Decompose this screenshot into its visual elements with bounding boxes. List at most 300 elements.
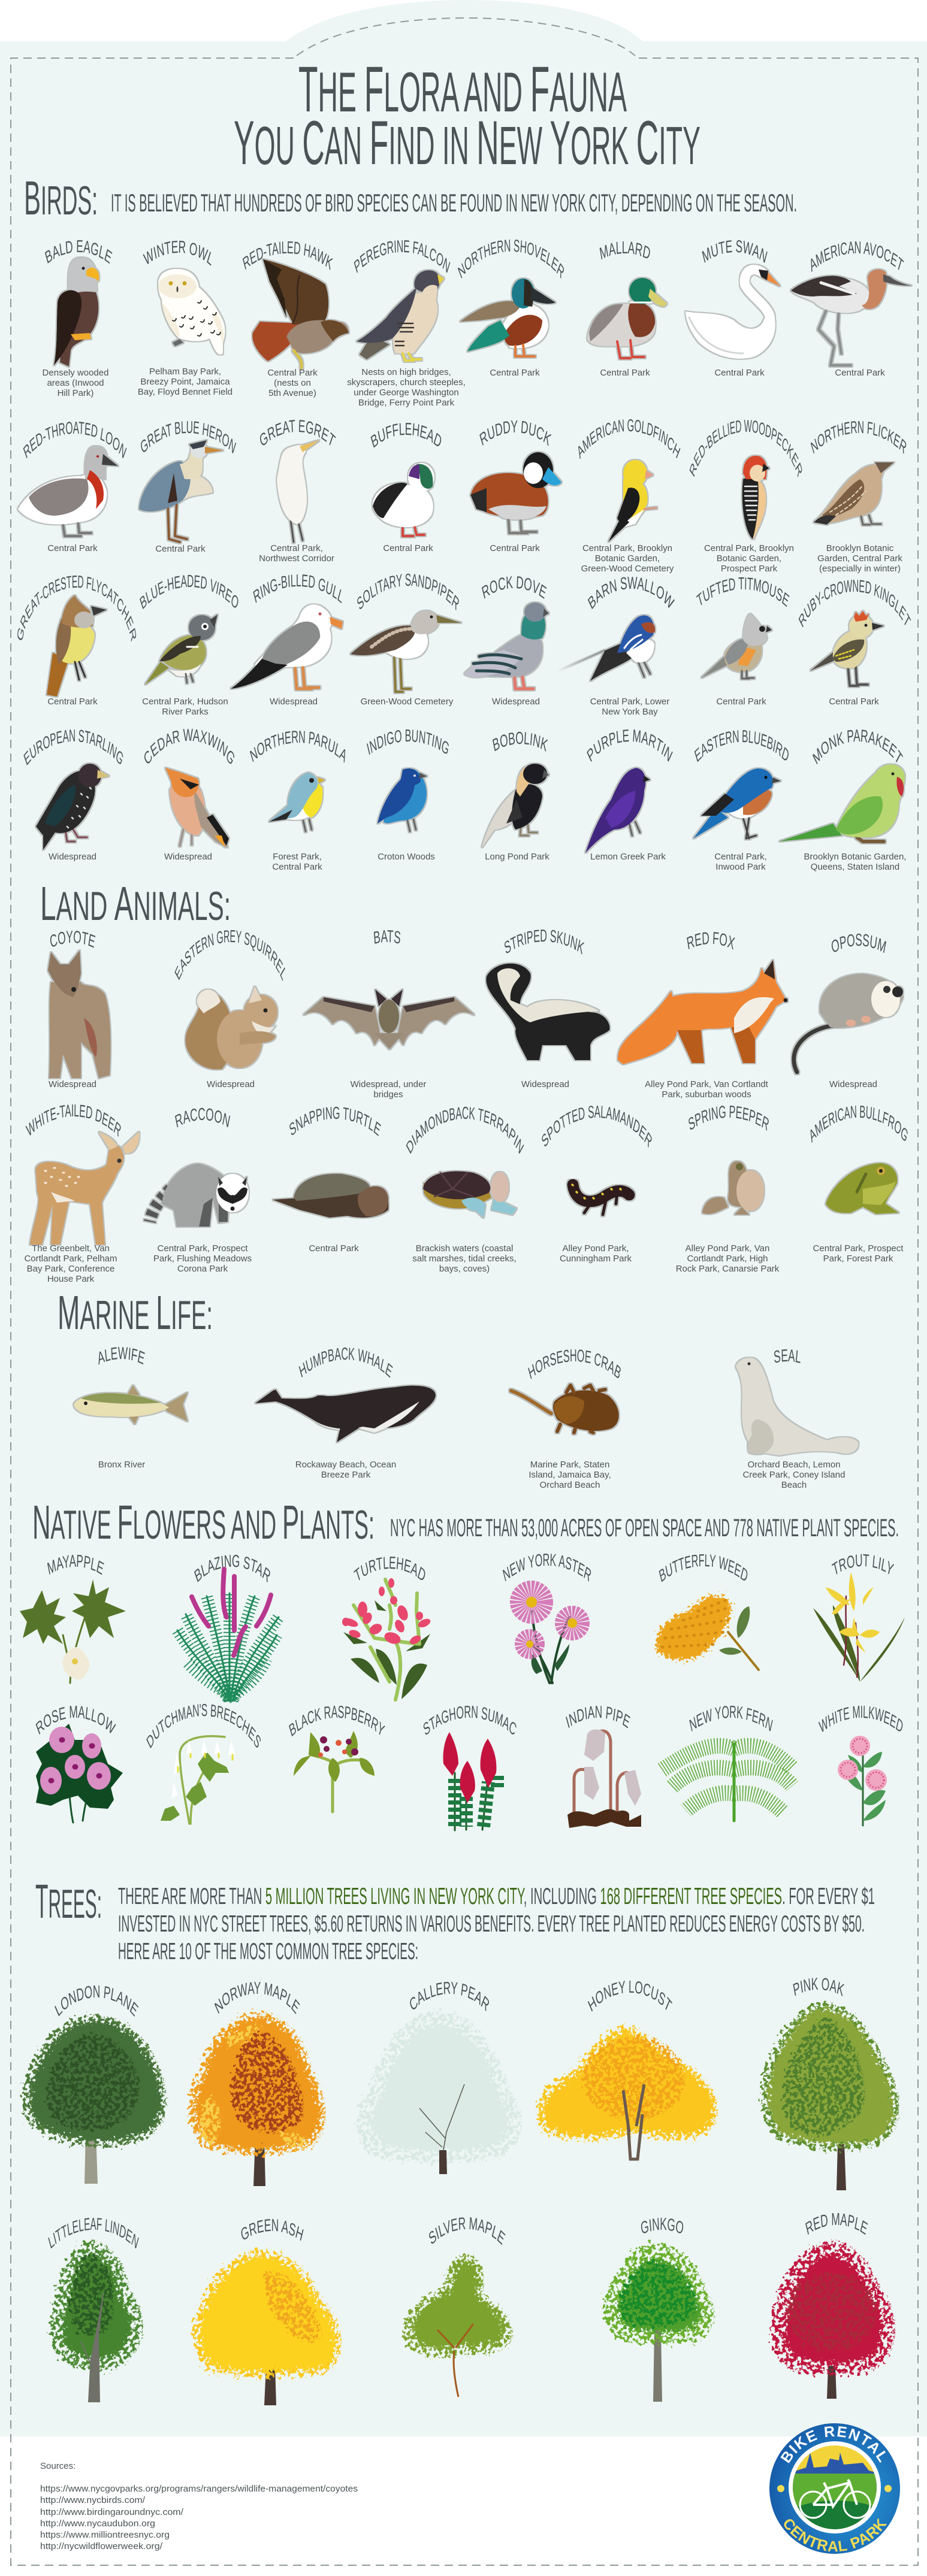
location: New York Bay (602, 707, 658, 717)
location: Forest Park, (273, 852, 322, 862)
name: GREAT-CRESTED FLYCATCHER (17, 576, 137, 642)
location: Central Park (155, 544, 206, 554)
icon: red fox (618, 960, 787, 1064)
sources: http://www.nycaudubon.org (40, 2519, 155, 2529)
heading: marine life: MARINE LIFE: (58, 1286, 213, 1339)
icon: new york aster (520, 1590, 582, 1683)
icon: trout lily (813, 1572, 905, 1682)
icon: spring peeper (702, 1161, 764, 1215)
location: Cortlandt Park, High (687, 1254, 768, 1264)
name: AMERICAN GOLDFINCH (578, 419, 681, 459)
name: LITTLELEAF LINDEN (47, 2214, 140, 2253)
location: Rockaway Beach, Ocean (295, 1460, 396, 1470)
icon: silver maple (407, 2258, 509, 2397)
location: Lemon Greek Park (590, 852, 666, 862)
location: Green-Wood Cemetery (361, 697, 454, 707)
marine: humpback whale (255, 1344, 436, 1480)
heading: native flowers and plants: NATIVE FLOWERS AND PLANTS: (32, 1496, 375, 1549)
icon: black raspberry (294, 1731, 375, 1812)
location: Rock Park, Canarsie Park (676, 1264, 780, 1274)
icon: staghorn sumac (443, 1732, 497, 1830)
bird: ruby-crowned kinglet (796, 576, 913, 707)
tree: red maple (779, 2209, 889, 2399)
name: NORTHERN SHOVELER (458, 240, 564, 279)
location: Central Park, (270, 543, 323, 553)
animal: striped skunk (486, 926, 610, 1089)
location: Central Park (383, 543, 433, 553)
location: Widespread (492, 697, 540, 707)
location: Botanic Garden, (595, 553, 660, 564)
name: MAYAPPLE (46, 1551, 105, 1579)
name: STRIPED SKUNK (503, 926, 585, 958)
name: BUFFLEHEAD (370, 423, 441, 448)
name: RED-TAILED HAWK (242, 241, 333, 270)
icon: loon (18, 446, 118, 536)
location: Alley Pond Park, Van (686, 1243, 769, 1254)
location: Central Park (714, 368, 765, 378)
icon: tufted titmouse (701, 614, 772, 679)
location: Widespread (49, 1079, 96, 1089)
icon: squirrel (185, 986, 277, 1070)
bird: winter owl (138, 237, 232, 397)
name: PINK OAK (792, 1974, 846, 2000)
location: Bay, Floyd Bennet Field (138, 387, 232, 397)
name: BARN SWALLOW (587, 577, 675, 610)
location: Widespread (829, 1079, 877, 1089)
panel: trees (30, 1875, 893, 2405)
bird: red-tailed hawk (241, 238, 349, 398)
title: YOU CAN FIND IN NEW YORK CITY (234, 108, 700, 178)
icon: purple martin (585, 768, 650, 853)
location: Widespread (521, 1079, 569, 1089)
location: Bronx River (98, 1460, 145, 1470)
icon: salamander (572, 1185, 629, 1215)
bird: american goldfinch (575, 416, 682, 574)
bird: indigo bunting (365, 726, 451, 862)
name: NORWAY MAPLE (213, 1978, 301, 2018)
icon: peregrine falcon (357, 270, 444, 361)
icon: mallard (587, 278, 667, 358)
name: GREAT EGRET (260, 420, 336, 446)
bird: rock dove (464, 573, 549, 707)
name: CEDAR WAXWING (144, 728, 234, 764)
icon: norway maple (196, 2018, 320, 2186)
name: COYOTE (49, 927, 96, 952)
tree: green ash (200, 2215, 336, 2405)
icon: butterfly weed (656, 1596, 759, 1670)
panel: native flowers and plants (20, 1496, 905, 1830)
name: GREAT BLUE HERON (141, 421, 236, 454)
icon: winter owl (158, 269, 225, 355)
bird: cedar waxwing (141, 725, 237, 862)
animal: red fox (618, 928, 787, 1100)
trees intro text (118, 1884, 875, 1964)
icon: red-tailed hawk (252, 259, 349, 368)
logo text bottom: CENTRAL PARK (779, 2515, 890, 2555)
location: Central Park (490, 543, 540, 553)
location: Island, Jamaica Bay, (529, 1470, 611, 1480)
tree: honey locust (543, 1977, 712, 2159)
location: Corona Park (177, 1264, 228, 1274)
name: ROCK DOVE (482, 576, 546, 599)
name: OPOSSUM (830, 931, 887, 958)
location: Central Park, Brooklyn (582, 543, 672, 553)
name: HONEY LOCUST (586, 1977, 674, 2016)
location: Hill Park) (58, 388, 93, 398)
icon: barn swallow (558, 615, 655, 681)
location: Orchard Beach, Lemon (747, 1460, 841, 1470)
icon: humpback whale (255, 1386, 436, 1442)
plant: turtlehead (342, 1553, 432, 1700)
tree: callery pear (364, 1978, 516, 2174)
bird: northern parula (248, 727, 349, 872)
bird: barn swallow (558, 573, 676, 717)
plant: mayapple (20, 1551, 126, 1683)
icon: snapping turtle (273, 1174, 388, 1218)
icon: bufflehead (373, 463, 434, 536)
sources: http://www.birdingaroundnyc.com/ (40, 2507, 184, 2517)
name: SNAPPING TURTLE (288, 1103, 382, 1140)
location: Beach (781, 1480, 807, 1490)
location: Queens, Staten Island (811, 862, 899, 872)
location: Brackish waters (coastal (416, 1243, 513, 1254)
location: Widespread (49, 852, 96, 862)
icon: alewife (74, 1385, 188, 1424)
location: Croton Woods (378, 852, 435, 862)
icon: eastern bluebird (693, 768, 781, 839)
location: Alley Pond Park, (563, 1243, 629, 1254)
bird: ruddy duck (470, 417, 561, 553)
name: CALLERY PEAR (407, 1978, 491, 2015)
location: salt marshes, tidal creeks, (412, 1254, 517, 1264)
logo text: BIKE RENTAL (777, 2423, 892, 2466)
icon: american avocet (791, 270, 912, 365)
panel: land animals (24, 877, 910, 1284)
marine: alewife (74, 1343, 188, 1470)
location: Breezy Point, Jamaica (140, 377, 230, 387)
location: Park, Flushing Meadows (153, 1254, 252, 1264)
animal: opossum (794, 931, 903, 1089)
marine: horseshoe crab (511, 1346, 623, 1490)
plant: trout lily (813, 1551, 905, 1682)
icon: gull (231, 604, 343, 689)
icon: indigo bunting (378, 768, 427, 831)
name: DIAMONDBACK TERRAPIN (404, 1103, 526, 1158)
tree: norway maple (196, 1978, 320, 2186)
bird: american avocet (791, 238, 912, 378)
panel: marine life (58, 1286, 858, 1490)
location: Central Park, Lower (590, 697, 669, 707)
location: Nests on high bridges, (361, 367, 451, 377)
tree: littleleaf linden (47, 2214, 140, 2402)
icon: green ash (200, 2257, 336, 2405)
location: Brooklyn Botanic Garden, (804, 852, 906, 862)
location: Marine Park, Staten (530, 1460, 609, 1470)
icon: starling (36, 764, 109, 850)
bird: great blue heron (138, 417, 238, 554)
bird: mute swan (686, 237, 780, 378)
name: RUBY-CROWNED KINGLET (798, 580, 911, 628)
name: BATS (373, 927, 401, 948)
name: RED FOX (686, 928, 736, 954)
icon: goldfinch (608, 460, 656, 542)
name: BUTTERFLY WEED (657, 1551, 750, 1586)
location: Widespread (270, 697, 318, 707)
name: MUTE SWAN (702, 240, 768, 263)
heading: land animals: LAND ANIMALS: (40, 877, 231, 930)
logo dots (777, 2485, 892, 2492)
location: Cunningham Park (560, 1254, 632, 1264)
name: TUFTED TITMOUSE (696, 577, 790, 607)
location: Widespread (164, 852, 212, 862)
icon: turtlehead (342, 1578, 432, 1700)
icon: pink oak (768, 2009, 893, 2190)
animal: snapping turtle (273, 1103, 388, 1254)
sources: https://www.milliontreesnyc.org (40, 2530, 170, 2540)
location: bays, coves) (439, 1264, 490, 1274)
location: Long Pond Park (485, 852, 549, 862)
name: HUMPBACK WHALE (297, 1344, 394, 1381)
icon: monk parakeet (779, 764, 905, 841)
location: Garden, Central Park (817, 553, 902, 564)
location: Orchard Beach (540, 1480, 600, 1490)
name: BOBOLINK (491, 728, 549, 756)
icon: kinglet (810, 611, 884, 686)
location: Widespread (207, 1079, 255, 1089)
panel: birds (15, 171, 913, 872)
icon: ginkgo (611, 2250, 708, 2402)
animal: raccoon (150, 1104, 252, 1274)
icon: coyote (48, 951, 110, 1078)
heading: birds: BIRDS: (24, 171, 98, 225)
bird: ring-billed gull (231, 571, 345, 707)
name: TURTLEHEAD (352, 1553, 428, 1586)
name: AMERICAN BULLFROG (807, 1102, 910, 1146)
name: ALEWIFE (96, 1343, 146, 1369)
tree: pink oak (768, 1974, 893, 2190)
location: (nests on (274, 378, 311, 388)
icon: mayapple (20, 1579, 126, 1683)
icon: rose mallow (36, 1724, 123, 1823)
icon: ruddy duck (470, 452, 561, 533)
location: Central Park (829, 697, 879, 707)
animal: american bullfrog (807, 1102, 910, 1264)
icon: london plane (30, 2021, 161, 2184)
bird: bald eagle (43, 237, 114, 398)
location: Creek Park, Coney Island (743, 1470, 845, 1480)
name: DUTCHMAN'S BREECHES (144, 1700, 263, 1752)
location: Central Park (47, 543, 98, 553)
icon: sandpiper (351, 611, 461, 692)
location: The Greenbelt, Van (32, 1243, 110, 1254)
location: 5th Avenue) (268, 388, 316, 398)
plant: black raspberry (287, 1702, 386, 1812)
name: HORSESHOE CRAB (526, 1346, 623, 1383)
icon: flycatcher (47, 595, 107, 697)
plant: rose mallow (34, 1702, 123, 1823)
title: THE FLORA AND FAUNA (298, 53, 627, 125)
bird: bufflehead (369, 419, 443, 553)
location: Pelham Bay Park, (149, 367, 221, 377)
name: NORTHERN FLICKER (810, 421, 906, 454)
bird: northern shoveler (456, 236, 566, 378)
icon: bald eagle (54, 258, 99, 367)
logo: bike rental central park (769, 2423, 900, 2554)
icon: bat (303, 989, 475, 1049)
name: RACCOON (174, 1104, 231, 1132)
icon: mute swan (686, 270, 780, 359)
bird: mallard (587, 238, 667, 378)
name: EUROPEAN STARLING (23, 729, 123, 765)
icon: flicker (814, 462, 894, 525)
bird: solitary sandpiper (351, 570, 461, 707)
name: PEREGRINE FALCON (354, 240, 451, 273)
name: PURPLE MARTIN (585, 726, 675, 766)
name: RED-THROATED LOON (23, 422, 127, 459)
bird: purple martin (585, 726, 675, 862)
location: Inwood Park (715, 862, 766, 872)
plant: butterfly weed (656, 1551, 759, 1670)
name: SILVER MAPLE (427, 2214, 507, 2249)
icon: blazing star (177, 1569, 279, 1702)
name: NEW YORK FERN (688, 1702, 774, 1736)
icon: callery pear (364, 2017, 516, 2174)
tree: london plane (30, 1982, 161, 2184)
icon: dutchman's breeches (161, 1736, 235, 1824)
name: SEAL (773, 1346, 802, 1367)
location: Brooklyn Botanic (826, 543, 894, 553)
icon: new york fern (662, 1744, 792, 1821)
name: EASTERN GREY SQUIRREL (173, 926, 289, 984)
bird: tufted titmouse (695, 574, 791, 707)
bird: red-bellied woodpecker (687, 416, 805, 574)
marine: seal (736, 1346, 858, 1490)
location: Central Park (272, 862, 322, 872)
location: Central Park (267, 368, 318, 378)
title (234, 53, 700, 178)
location: Central Park (600, 368, 650, 378)
plant: new york fern (662, 1702, 792, 1821)
location: under George Washington (354, 388, 459, 398)
location: Central Park, Prospect (813, 1243, 904, 1254)
location: Central Park (309, 1243, 359, 1254)
animal: diamondback terrapin (404, 1103, 526, 1274)
tree: ginkgo (611, 2214, 708, 2402)
icon: opossum (794, 974, 903, 1072)
sources: Sources: (40, 2461, 76, 2471)
name: EASTERN BLUEBIRD (693, 727, 791, 766)
name: SOLITARY SANDPIPER (357, 574, 459, 610)
sources: http://www.nycbirds.com/ (40, 2495, 146, 2505)
bird: european starling (22, 726, 125, 862)
icon: cedar waxwing (165, 768, 229, 847)
plant: white milkweed (817, 1702, 905, 1826)
plant: indian pipe (564, 1702, 641, 1828)
icon: northern parula (269, 773, 325, 831)
name: GREEN ASH (239, 2215, 305, 2245)
bird: blue-headed vireo (138, 571, 241, 717)
icon: terrapin (423, 1172, 517, 1218)
name: WHITE MILKWEED (817, 1702, 905, 1737)
name: BLUE-HEADED VIREO (140, 575, 238, 610)
location: (especially in winter) (819, 564, 901, 574)
name: SPOTTED SALAMANDER (539, 1102, 654, 1151)
location: Densely wooded (43, 368, 108, 378)
plant: new york aster (501, 1550, 593, 1683)
location: River Parks (162, 707, 209, 717)
location: bridges (373, 1089, 403, 1100)
location: Park, suburban woods (662, 1089, 751, 1100)
sources: http://nycwildflowerweek.org/ (40, 2541, 163, 2551)
location: Central Park, Brooklyn (704, 543, 794, 553)
name: RUDDY DUCK (479, 420, 551, 446)
animal: bats (303, 927, 475, 1100)
icon: bobolink (482, 764, 549, 847)
name: GINKGO (639, 2214, 685, 2239)
icon: raccoon (150, 1164, 249, 1227)
location: areas (Inwood (47, 378, 104, 388)
plant: staghorn sumac (421, 1702, 518, 1830)
name: INDIGO BUNTING (367, 729, 449, 755)
name: SPRING PEEPER (687, 1102, 771, 1134)
icon: littleleaf linden (57, 2247, 138, 2402)
location: Bay Park, Conference (27, 1264, 114, 1274)
animal: white-tailed deer (24, 1101, 140, 1284)
location: Central Park, Hudson (142, 697, 228, 707)
sources (40, 2461, 358, 2551)
location: Green-Wood Cemetery (581, 564, 674, 574)
animal: spring peeper (676, 1102, 780, 1274)
location: Prospect Park (721, 564, 778, 574)
bird: northern flicker (809, 417, 908, 574)
location: Breeze Park (321, 1470, 371, 1480)
location: skyscrapers, church steeples, (347, 377, 466, 388)
icon: honey locust (543, 2032, 712, 2159)
bird: monk parakeet (779, 726, 906, 872)
trees intro text: HERE ARE 10 OF THE MOST COMMON TREE SPECIES: (118, 1939, 418, 1964)
icon: bullfrog (826, 1163, 899, 1214)
location: Central Park (47, 697, 98, 707)
icon: northern shoveler (460, 279, 555, 356)
panel: trees: TREES: (35, 1875, 102, 1928)
location: Park, Forest Park (823, 1254, 893, 1264)
icon: rock dove (464, 603, 549, 689)
bird: bobolink (482, 728, 549, 862)
name: BALD EAGLE (44, 240, 113, 264)
name: RED-BELLIED WOODPECKER (689, 419, 802, 478)
name: RING-BILLED GULL (253, 574, 342, 604)
bird: great-crested flycatcher (15, 571, 138, 707)
location: Central Park, (714, 852, 767, 862)
location: Cortlandt Park, Pelham (24, 1254, 117, 1264)
sources: https://www.nycgovparks.org/programs/rangers/wildlife-management/coyotes (40, 2484, 358, 2494)
name: BLAZING STAR (192, 1551, 273, 1587)
name: RED MAPLE (804, 2209, 869, 2239)
name: NORTHERN PARULA (250, 731, 345, 763)
name: NEW YORK ASTER (501, 1550, 593, 1585)
icon: bicycle (800, 2480, 870, 2518)
animal: coyote (48, 927, 110, 1089)
tree: silver maple (407, 2214, 509, 2397)
plant: blazing star (177, 1551, 279, 1702)
bird: peregrine falcon (347, 237, 466, 408)
bird: red-throated loon (18, 418, 128, 553)
location: Central Park (716, 697, 766, 707)
icon: deer (30, 1132, 140, 1245)
name: INDIAN PIPE (564, 1702, 632, 1733)
location: Botanic Garden, (717, 553, 781, 564)
name: MALLARD (599, 241, 650, 260)
